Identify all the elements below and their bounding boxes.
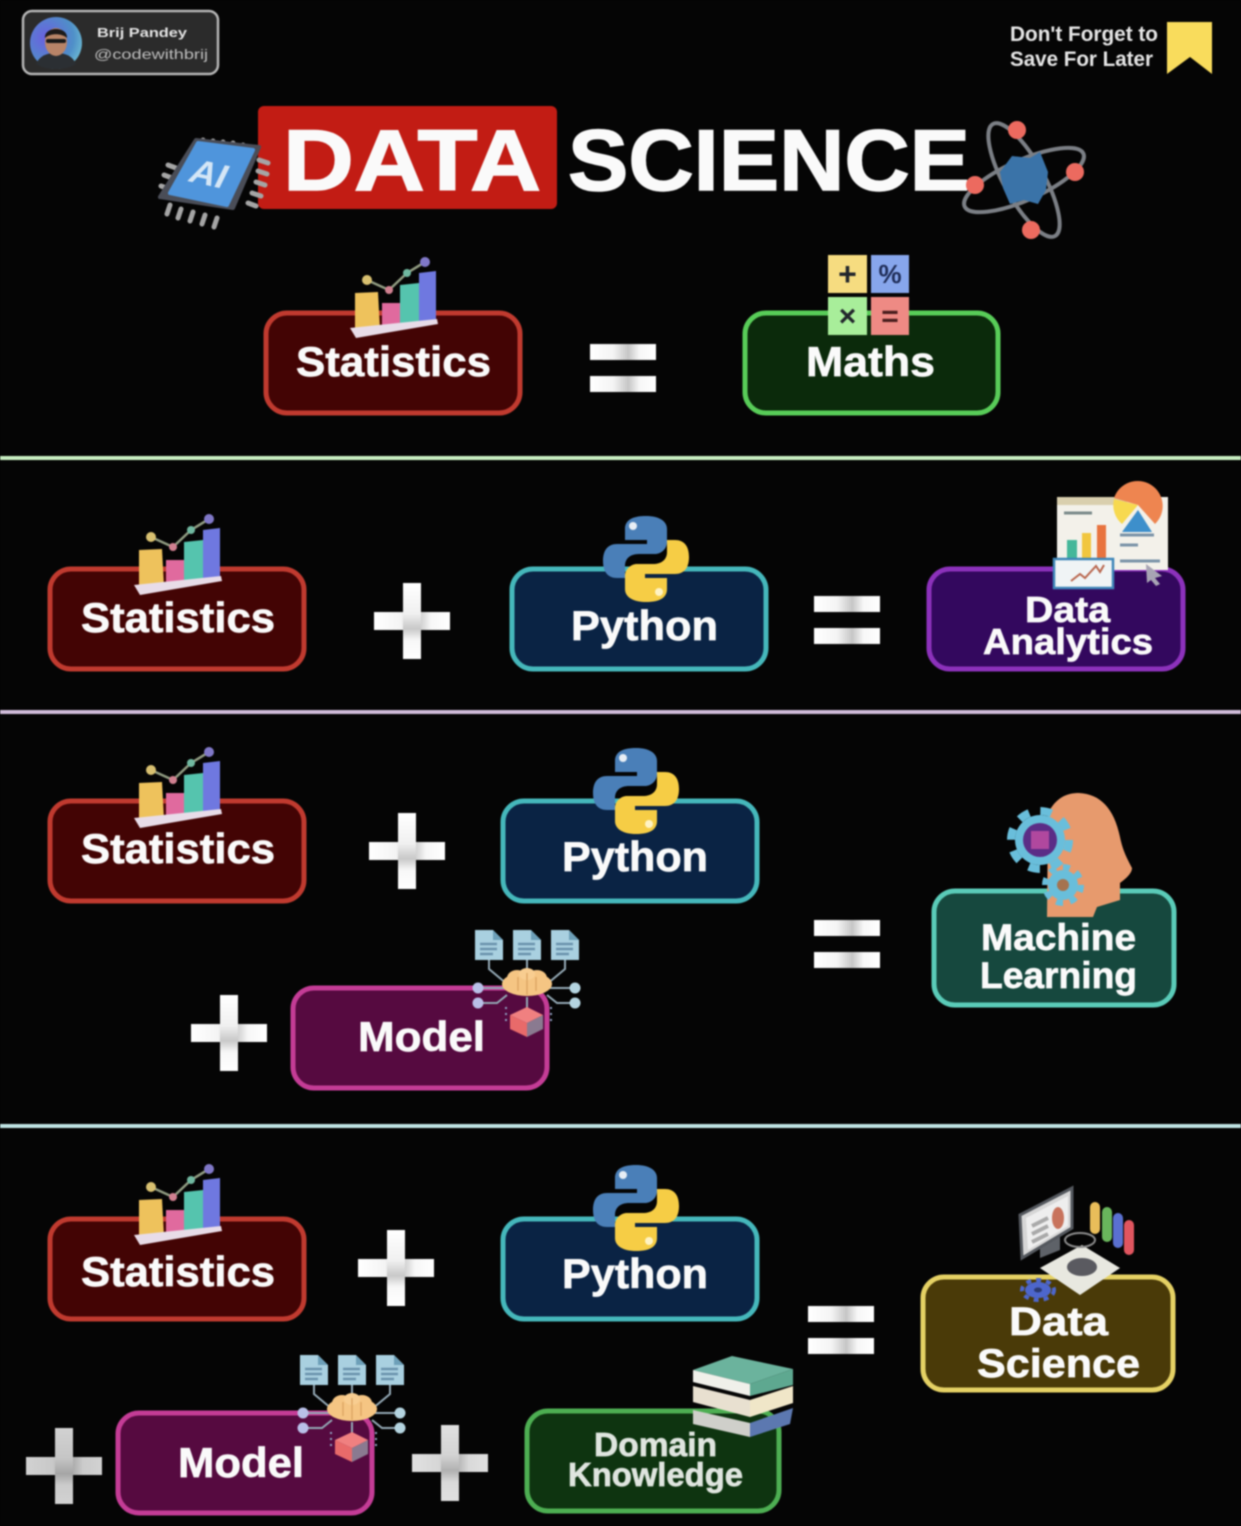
panel: data analytics: Data xyxy=(1025,589,1111,630)
icon: python logo xyxy=(593,748,679,834)
panel: data analytics: Analytics xyxy=(983,621,1153,662)
panel: domain knowledge xyxy=(527,1411,779,1511)
panel: data science: Data xyxy=(1009,1300,1109,1344)
author name: Brij Pandey xyxy=(97,25,188,40)
panel: maths: Maths xyxy=(806,338,935,385)
panel: model: Model xyxy=(358,1013,485,1060)
plus sign xyxy=(369,813,445,889)
title: data science xyxy=(258,106,970,209)
panel: python: Python xyxy=(562,1250,708,1297)
plus sign xyxy=(26,1428,102,1504)
icon: math operators: % xyxy=(878,259,902,289)
icon: data science workstation xyxy=(1020,1188,1134,1300)
plus sign xyxy=(374,583,450,659)
panel: data science xyxy=(923,1277,1173,1390)
panel: statistics xyxy=(50,1219,304,1319)
icon: AI chip xyxy=(160,140,268,227)
panel: data analytics xyxy=(929,569,1183,669)
icon: bar chart xyxy=(134,514,222,595)
save reminder text xyxy=(1010,23,1158,71)
panel: statistics: Statistics xyxy=(81,825,275,872)
panel: domain knowledge: Knowledge xyxy=(568,1456,743,1493)
equals sign xyxy=(814,596,880,644)
icon: analytics dashboard xyxy=(1054,481,1168,588)
icon: python logo xyxy=(593,1165,679,1251)
panel: model xyxy=(293,988,547,1088)
icon: avatar xyxy=(30,17,82,69)
section 3: machine learning xyxy=(50,747,1174,1088)
panel: machine learning: Learning xyxy=(980,955,1137,996)
panel: statistics: Statistics xyxy=(81,1248,275,1295)
panel: data science: Science xyxy=(977,1342,1140,1386)
icon: head with gears xyxy=(1011,793,1132,917)
equals sign xyxy=(814,920,880,968)
section 1: statistics equals maths xyxy=(266,255,998,413)
icon: neural model xyxy=(298,1355,406,1462)
equals sign xyxy=(590,344,656,392)
icon: math operators: = xyxy=(881,300,899,333)
panel: python xyxy=(512,569,766,669)
panel: maths xyxy=(745,313,998,413)
section 4: data science xyxy=(26,1164,1173,1513)
panel: statistics xyxy=(266,313,520,413)
panel: machine learning: Machine xyxy=(981,917,1136,958)
icon: bar chart xyxy=(134,747,222,828)
panel: python: Python xyxy=(571,602,718,649)
panel: statistics xyxy=(50,801,304,901)
panel: statistics: Statistics xyxy=(296,338,491,385)
icon: math operators: + xyxy=(838,256,857,292)
panel: python: Python xyxy=(562,833,708,880)
panel: model xyxy=(118,1413,372,1513)
panel: model: Model xyxy=(178,1439,304,1486)
icon: bookmark xyxy=(1167,22,1212,74)
author handle: @codewithbrij xyxy=(94,46,208,62)
equals sign xyxy=(808,1306,874,1354)
author badge xyxy=(23,11,218,74)
icon: bar chart xyxy=(350,257,438,338)
section 2: data analytics xyxy=(50,481,1183,669)
icon: bar chart xyxy=(134,1164,222,1245)
panel: python xyxy=(503,1219,757,1319)
icon: stack of books xyxy=(693,1356,793,1437)
save reminder text: Save For Later xyxy=(1010,48,1153,71)
icon: python logo xyxy=(603,516,689,602)
panel: python xyxy=(503,801,757,901)
panel: statistics: Statistics xyxy=(81,594,275,641)
plus sign xyxy=(412,1425,488,1501)
title highlight: DATA: DATA xyxy=(283,113,541,209)
plus sign xyxy=(191,995,267,1071)
icon: math operators xyxy=(828,255,909,335)
icon: AI chip: AI xyxy=(183,154,235,196)
panel: domain knowledge: Domain xyxy=(594,1426,717,1463)
icon: neural model xyxy=(472,930,580,1037)
icon: atom xyxy=(956,114,1092,246)
icon: math operators: × xyxy=(839,300,856,333)
title word: SCIENCE: SCIENCE xyxy=(568,113,970,209)
panel: machine learning xyxy=(934,891,1174,1005)
plus sign xyxy=(358,1230,434,1306)
save reminder text: Don't Forget to xyxy=(1010,23,1158,46)
panel: statistics xyxy=(50,569,304,669)
